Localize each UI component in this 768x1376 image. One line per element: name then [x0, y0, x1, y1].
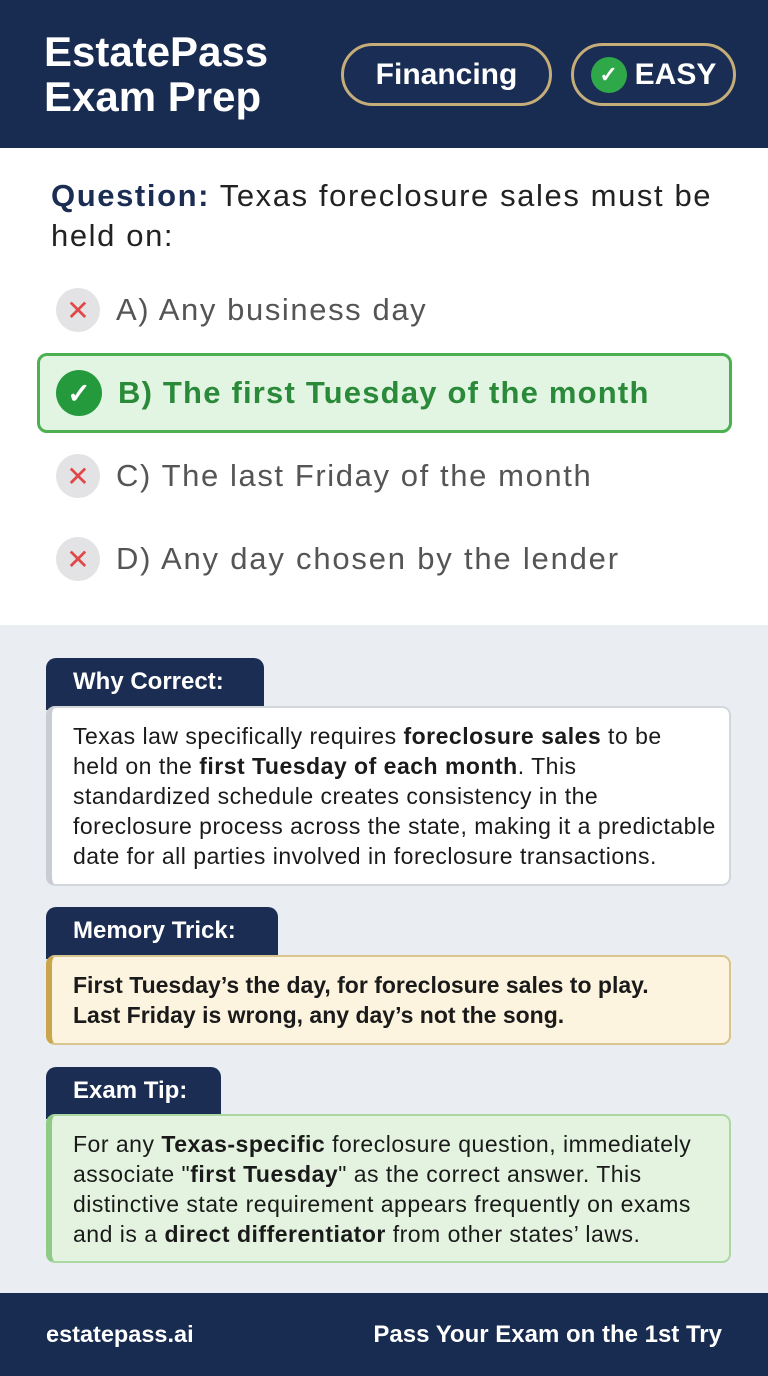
pill: category: Financing	[376, 58, 517, 90]
question	[51, 178, 712, 253]
option B correct: B) The first Tuesday of the month	[118, 375, 650, 410]
box: memory trick: First Tuesday’s the day, for foreclosure sales to play.	[73, 972, 649, 998]
box: memory trick: Last Friday is wrong, any day’s not the song.	[73, 1002, 564, 1028]
option B correct	[37, 353, 732, 433]
box: exam tip: distinctive state requirement appears frequently on exams	[73, 1191, 691, 1217]
box: exam tip: For any Texas-specific foreclosure question, immediately	[73, 1131, 691, 1157]
box: exam tip: associate "first Tuesday" as the correct answer. This	[73, 1161, 642, 1187]
footer	[0, 1293, 768, 1376]
option C: C) The last Friday of the month	[116, 458, 592, 493]
title	[44, 28, 268, 120]
footer tagline: Pass Your Exam on the 1st Try	[373, 1321, 722, 1348]
pill: category	[341, 43, 552, 106]
tab: why correct: Why Correct:	[73, 668, 224, 695]
box: why correct: standardized schedule creates consistency in the	[73, 783, 598, 809]
pill: difficulty	[571, 43, 736, 106]
box: why correct: held on the first Tuesday of each month. This	[73, 753, 577, 779]
box: exam tip: and is a direct differentiator from other states’ laws.	[73, 1221, 640, 1247]
box: why correct: foreclosure process across the state, making it a predictable	[73, 813, 716, 839]
question: Question: Texas foreclosure sales must be	[51, 178, 712, 213]
tab: memory trick	[46, 907, 278, 959]
box: memory trick	[46, 955, 731, 1045]
option D: ✕	[66, 544, 90, 574]
title: Exam Prep	[44, 73, 261, 120]
box: why correct	[46, 706, 731, 886]
tab: exam tip	[46, 1067, 221, 1119]
box: why correct: Texas law specifically requires foreclosure sales to be	[73, 723, 662, 749]
header	[0, 0, 768, 148]
icon: check: ✓	[67, 378, 91, 408]
option C: ✕	[66, 460, 90, 492]
icon: check	[56, 370, 102, 416]
box: why correct: date for all parties involved in foreclosure transactions.	[73, 843, 657, 869]
explanation section	[0, 625, 768, 1293]
option A: A) Any business day	[116, 292, 427, 327]
pill: difficulty: EASY	[635, 58, 716, 90]
question: held on:	[51, 218, 174, 253]
option A: ✕	[66, 294, 90, 326]
tab: memory trick: Memory Trick:	[73, 917, 236, 944]
box: exam tip	[46, 1114, 731, 1263]
footer brand: estatepass.ai	[46, 1321, 194, 1347]
tab: exam tip: Exam Tip:	[73, 1077, 187, 1104]
option A	[56, 288, 427, 332]
pill: difficulty: ✓	[599, 62, 618, 86]
title: EstatePass	[44, 28, 268, 75]
option D: D) Any day chosen by the lender	[116, 541, 620, 576]
tab: why correct	[46, 658, 264, 710]
